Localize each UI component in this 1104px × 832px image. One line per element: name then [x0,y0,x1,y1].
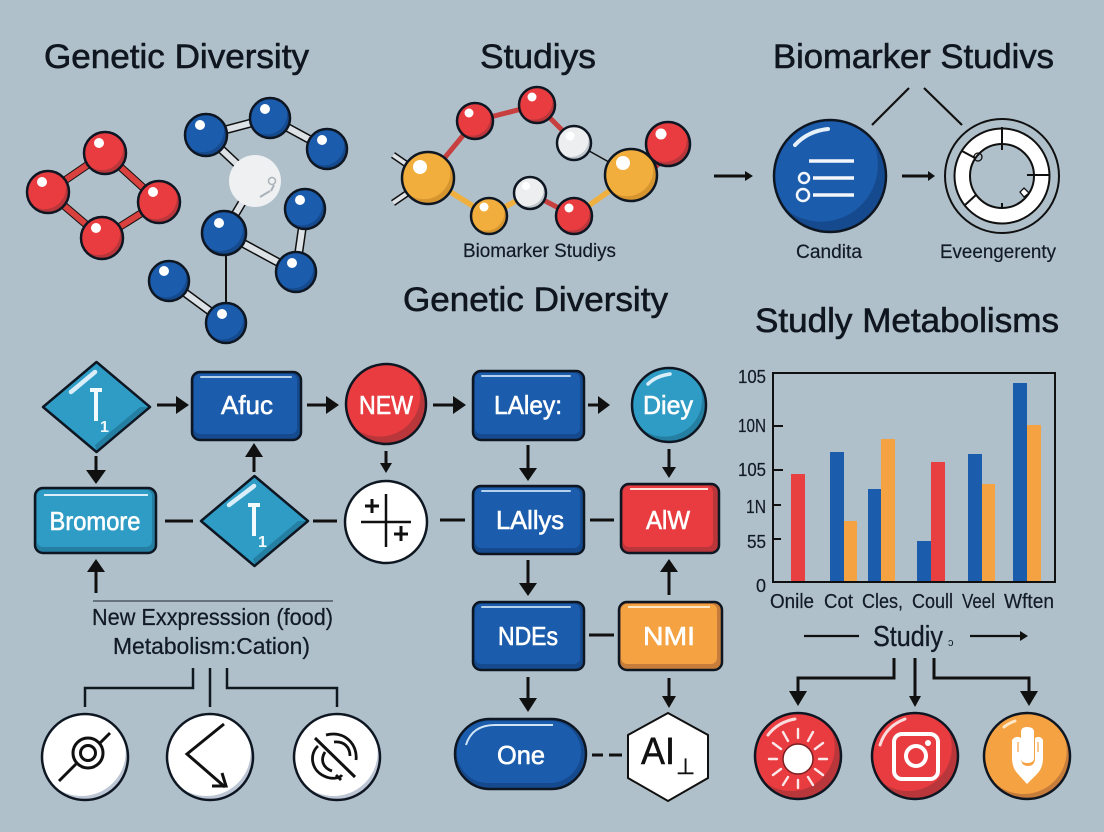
flow node: NDEs: NDEs [498,621,558,651]
arrow: to red sun [789,658,894,706]
arrow: diamond to Afuc [157,396,189,414]
flow node: diamond T1 top [43,362,150,452]
flow node: diamond T1 center: 1 [258,534,267,551]
lines from heading [872,88,962,125]
icon: red camera [872,713,958,799]
caption: New Expression: New Exxpresssion (food) [92,604,333,630]
flow node: AlW [621,484,719,553]
icon: ring with line [42,714,128,800]
label: Biomarker Studiys: Biomarker Studiys [463,241,616,262]
x axis labels: Wften [1004,591,1054,613]
flow node: NDEs [473,602,584,670]
connector: dashes [592,754,622,756]
arrow: into candidate circle [714,171,753,181]
icon: segmented ring [945,119,1059,233]
heading: Genetic Diversity: Genetic Diversity [44,38,309,76]
arrow: diamond up [245,443,263,472]
connector [165,520,193,522]
caption: Metabolism Cation: Metabolism:Cation) [113,633,310,659]
arrow: NEW down [380,451,392,473]
arrow: up into Bromore [87,559,105,593]
bars: Cles [868,439,895,582]
bars: Cot [830,452,857,582]
rule above caption [93,600,333,602]
icon: crossed loops [294,714,380,800]
flow node: Diey [632,368,706,442]
y axis labels: 10N [738,416,766,436]
flow node: Afuc [192,372,301,440]
y axis labels [738,367,766,596]
icon: orange pen [984,713,1070,799]
flow node: hexagon AI [628,713,708,801]
arrow right of Studiy [970,631,1028,641]
flow node: LAley: LAley: [494,390,562,420]
connectors to icons [85,668,337,707]
y axis labels: 55 [747,532,766,552]
connector [313,520,337,522]
flow node: NMI [619,602,722,670]
connector [590,518,614,522]
bar: Onile red [791,474,805,582]
y axis labels: 105 [738,367,766,387]
y axis labels: 1N [746,497,766,517]
flow node: NMI: NMI [643,621,695,651]
flow node: diamond T1 center [201,476,308,566]
flow node: NEW [346,364,426,444]
connector [440,518,465,522]
arrow: Diey to AlW [662,449,676,478]
flow node: AlW: AlW [646,505,690,535]
flow node: One: One [497,740,545,770]
connector [589,634,614,636]
label: Eveengerenty: Eveengerenty [940,242,1056,263]
icon: angled arrow [167,714,253,800]
chart frame [773,373,1055,582]
x axis labels: Onile [770,591,814,613]
flow node: Afuc: Afuc [221,390,273,420]
bar chart [738,367,1055,613]
x axis labels: Cot [824,591,853,613]
flow node: Bromore [35,488,156,553]
arrow: LAley to LAllys [519,445,537,481]
heading: Biomarker Studivs: Biomarker Studivs [773,38,1054,76]
x axis labels: Coull [912,591,953,613]
arrow: NMI to hexagon [662,678,676,708]
flow node: hexagon AI: AI [641,731,675,773]
icon: blue list circle [774,120,886,232]
arrow: to red camera [909,658,921,707]
flow node: LAley [473,371,584,440]
bars: Coull [917,462,945,582]
bars: Veel [968,454,995,582]
flow node: One [455,719,586,789]
y axis labels: 105 [738,460,766,480]
molecule: red ring [27,132,180,259]
molecule: mixed chain [393,87,690,234]
arrow: NEW to LAley [433,396,466,414]
flow node: LAllys [473,486,584,554]
flow node: LAllys: LAllys [496,505,564,535]
heading: Studiys: Studiys [480,38,596,76]
arrow: NMI up to AlW [660,559,678,595]
y axis labels: 0 [756,576,766,596]
icon: red sun [755,713,841,799]
flow node: Diey: Diey [643,390,693,420]
label: Studiy: Studiy [873,621,943,653]
arrow: NDEs to One [519,677,537,712]
label: Studiy: ɔ [948,637,954,649]
arrow: LAllys to NDEs [519,560,537,596]
heading: Genetic Diversity (center): Genetic Diversity [403,281,668,319]
molecule: blue network [149,98,347,343]
arrow: LAley to Diey [588,396,610,414]
x axis labels: Veel [962,591,995,613]
heading: Studly Metabolisms: Studly Metabolisms [755,302,1059,340]
flow node: hexagon AI: ⊥ [676,755,695,780]
arrow: diamond down [86,456,106,484]
arrow: Afuc to NEW [307,396,339,414]
flow node: NEW: NEW [359,390,413,420]
flow node: diamond T1 top: 1 [100,419,109,436]
label: Candita: Candita [796,242,862,263]
flow node: Bromore: Bromore [50,506,140,536]
x axis labels [770,591,1054,613]
flow node: plus circle [345,481,427,563]
bars: Wften [1013,383,1041,582]
arrow: to ring [902,171,935,181]
line left of Studiy [804,635,859,637]
arrow: to orange pen [934,658,1038,706]
x axis labels: Cles, [862,591,903,613]
